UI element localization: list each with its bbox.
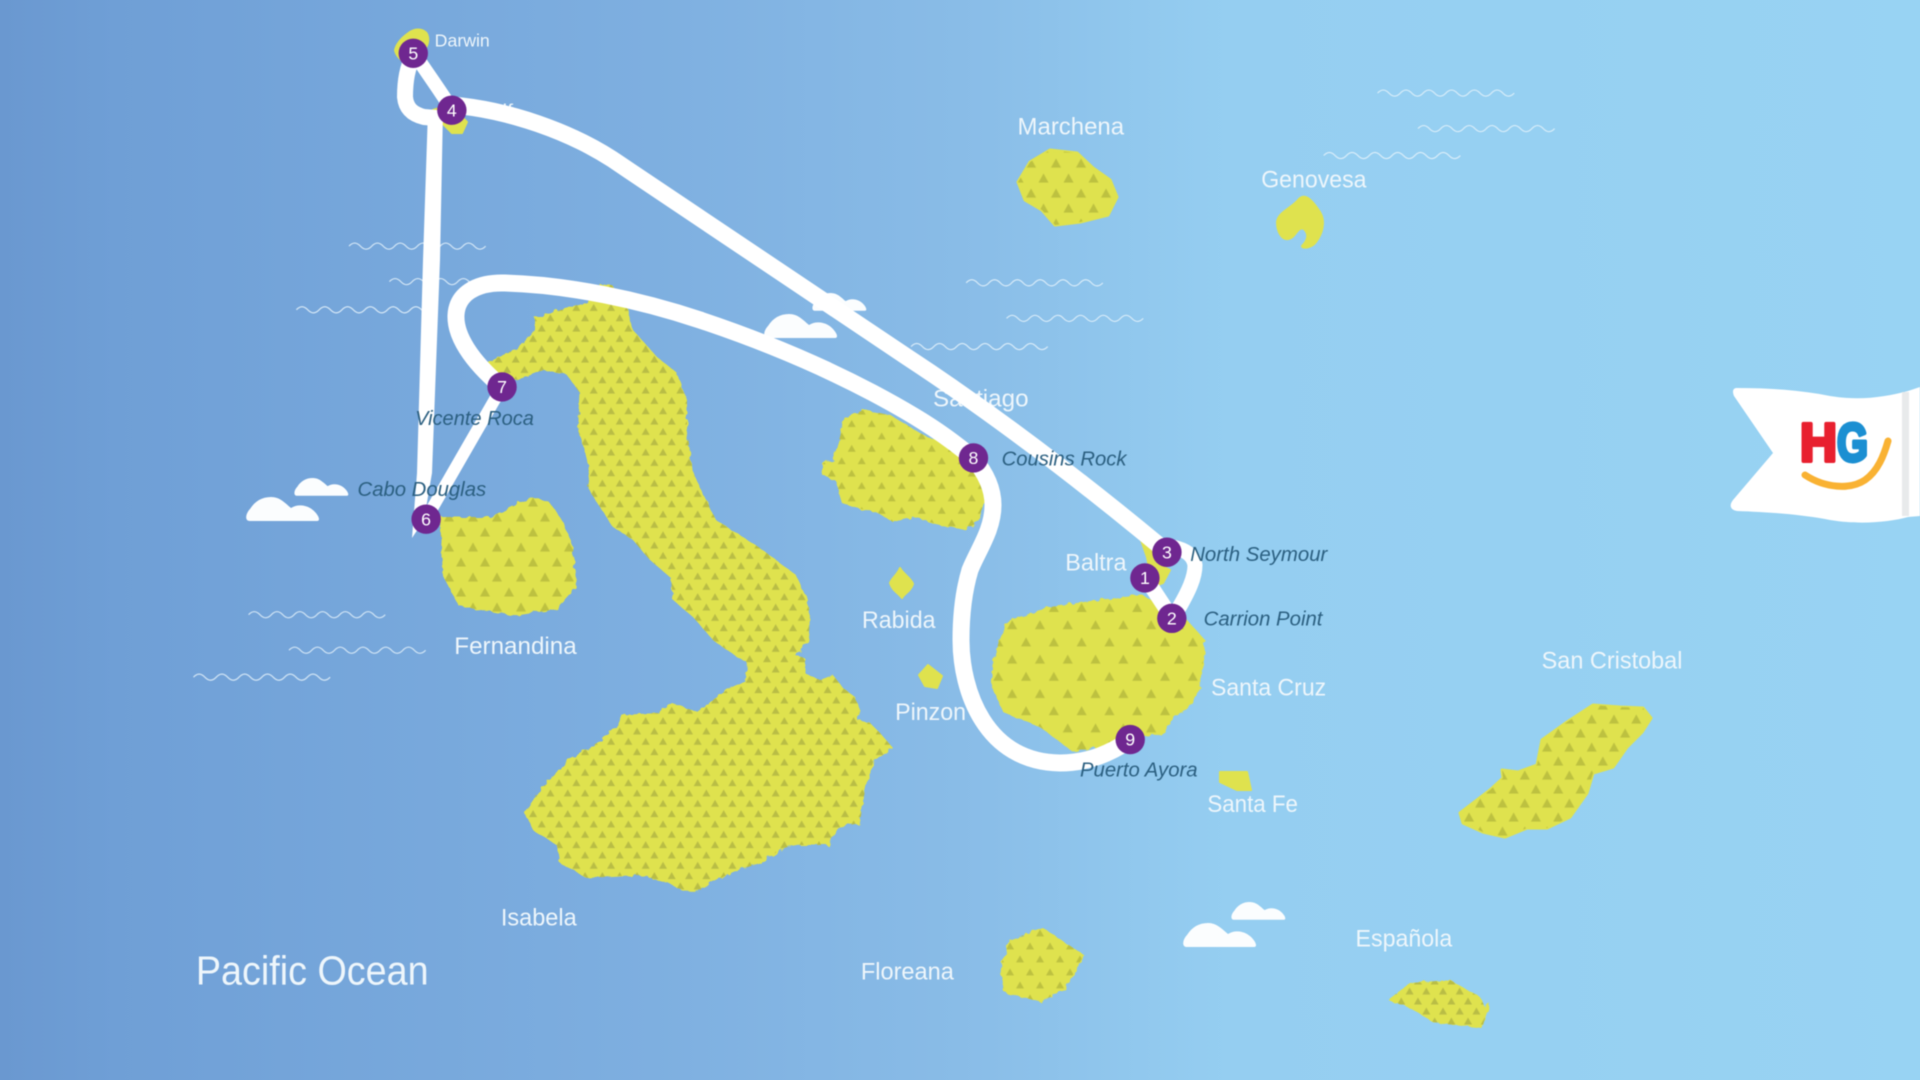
stop labels: Puerto Ayora (1080, 759, 1198, 781)
island labels: Rabida (862, 607, 936, 634)
island labels: San Cristobal (1542, 648, 1682, 675)
stop 4: 4 (447, 100, 457, 120)
islands (395, 30, 1651, 1028)
leg 3 to 4 (452, 105, 1167, 552)
island: Pinzon (919, 665, 942, 688)
stop 3 (1152, 538, 1182, 567)
stop 6 (411, 504, 441, 534)
island labels: Fernandina (454, 633, 577, 660)
island labels: Marchena (1018, 114, 1124, 141)
island: Baltra (1140, 537, 1170, 587)
island labels: Santa Fe (1207, 791, 1298, 818)
island: Espanola (1388, 980, 1490, 1028)
island: Isabela (487, 285, 893, 893)
wave lines (193, 90, 1555, 680)
stop 7 (487, 372, 517, 402)
island: Genovesa (1277, 197, 1323, 248)
label: Pacific Ocean: Pacific Ocean (196, 947, 429, 993)
stop 9 (1116, 725, 1145, 754)
stop 9: 9 (1125, 730, 1135, 750)
island labels: Genovesa (1261, 166, 1367, 193)
stop 4 (437, 96, 467, 125)
clouds (246, 293, 1285, 947)
logo letter G: G (1837, 413, 1868, 473)
island: Marchena (1018, 150, 1117, 225)
stop 8: 8 (969, 448, 979, 468)
island: Darwin (395, 30, 428, 62)
leg 5 to 6 (405, 57, 443, 538)
stop labels (358, 408, 1329, 781)
stop 6: 6 (421, 509, 431, 529)
island: Fernandina (440, 497, 576, 616)
logo smile (1805, 441, 1888, 486)
island: San Cristobal (1460, 705, 1651, 837)
island labels: Santa Cruz (1211, 675, 1326, 702)
stop 2: 2 (1167, 608, 1177, 628)
numbered stops (399, 39, 1187, 754)
stop labels: Cabo Douglas (358, 479, 486, 501)
small islands (395, 30, 1323, 790)
route (405, 53, 1195, 763)
island labels: Santiago (933, 386, 1029, 413)
island: Rabida (890, 568, 913, 598)
island labels: Darwin (435, 31, 490, 51)
logo flag (1731, 387, 1920, 523)
stop 7: 7 (497, 377, 507, 397)
island: Santiago (822, 410, 985, 530)
stop 3: 3 (1162, 542, 1172, 562)
stop 5: 5 (408, 43, 418, 63)
leg 4 to 5 (414, 53, 452, 110)
island labels: Española (1356, 926, 1453, 953)
stop 1: 1 (1140, 568, 1150, 588)
stop labels: Cousins Rock (1002, 448, 1127, 470)
leg 1 to 2 to 3 (1145, 546, 1195, 618)
island: Santa Cruz (992, 595, 1205, 752)
island labels: Floreana (861, 959, 954, 986)
island: Floreana (1000, 928, 1084, 1002)
flag cloth (1731, 387, 1920, 523)
logo letter H: H (1800, 413, 1837, 473)
leg 7 to 8 (456, 283, 973, 458)
stop labels: Carrion Point (1204, 609, 1324, 631)
island labels: Isabela (501, 905, 577, 932)
leg 6 to 7 (426, 387, 502, 519)
island labels: Baltra (1065, 550, 1127, 577)
stop labels: Vicente Roca (415, 408, 534, 430)
stop labels: North Seymour (1190, 544, 1329, 566)
flag pole band (1902, 392, 1909, 516)
stop 1 (1130, 563, 1160, 593)
island: Santa Fe (1220, 772, 1251, 790)
island: Wolf (433, 105, 467, 133)
leg 8 to 9 (961, 458, 1130, 763)
island labels: Pinzon (895, 699, 966, 726)
island labels: Wolf (471, 100, 513, 120)
stop 8 (959, 443, 988, 473)
stop 2 (1157, 604, 1187, 633)
stop 5 (399, 39, 428, 68)
island labels (435, 31, 1682, 986)
